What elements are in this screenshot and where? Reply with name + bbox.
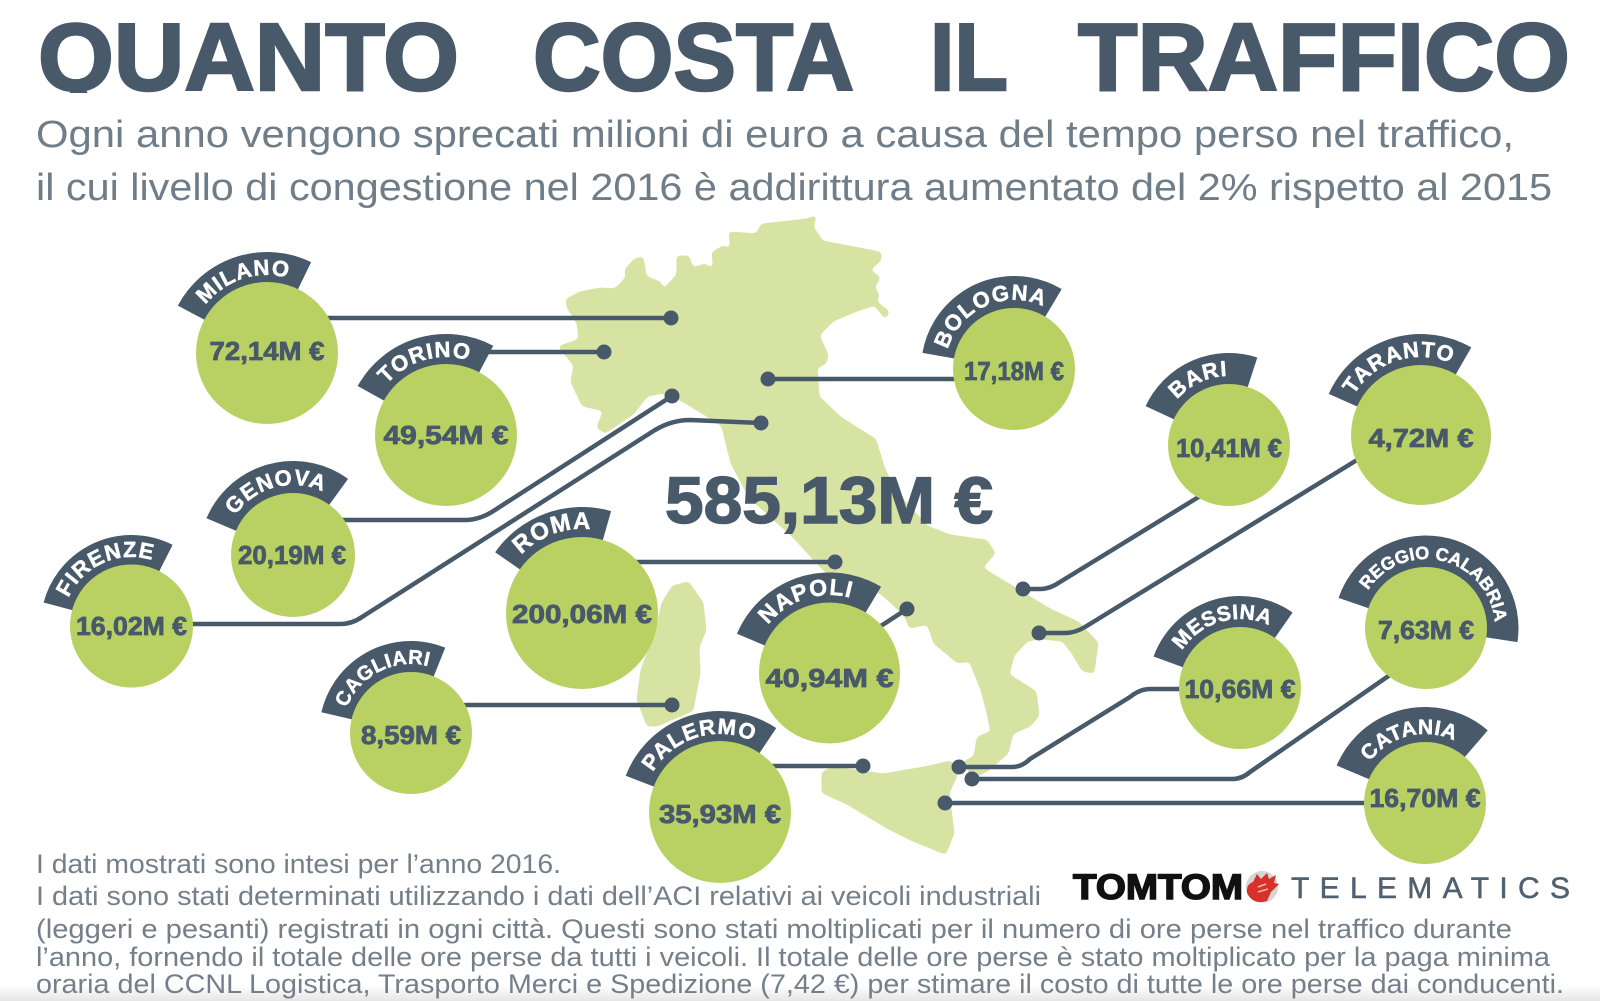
connector lines and dots xyxy=(170,310,1400,810)
city: Genova: GENOVA xyxy=(226,469,322,512)
wordmark: Telematics: TELEMATICS xyxy=(1291,872,1570,905)
city: Firenze: FIRENZE xyxy=(55,542,154,597)
city: Milano: 72,14M € xyxy=(210,336,324,366)
city: Reggio Calabria: 7,63M € xyxy=(1378,615,1474,645)
methodology note: (leggeri e pesanti) registrati in ogni città. Questi sono stati moltiplicati per il numero di ore perse nel traffico durante xyxy=(36,914,1512,944)
title: COSTA xyxy=(533,4,854,111)
city: Torino xyxy=(358,334,517,506)
city: Taranto: 4,72M € xyxy=(1368,423,1474,453)
Sardinia xyxy=(638,583,705,725)
city: Firenze: 16,02M € xyxy=(76,611,187,641)
methodology note: I dati sono stati determinati utilizzando i dati dell’ACI relativi ai veicoli industriali xyxy=(36,881,1041,911)
Sicily xyxy=(823,762,957,853)
city: Taranto: TARANTO xyxy=(1341,341,1454,392)
city: Palermo xyxy=(626,711,791,883)
city: Roma: ROMA xyxy=(511,512,590,554)
city: Torino: 49,54M € xyxy=(383,420,509,450)
city: Napoli: 40,94M € xyxy=(766,663,893,693)
city: Palermo: PALERMO xyxy=(640,718,756,772)
city: Messina: MESSINA xyxy=(1171,604,1269,650)
city: Bari: 10,41M € xyxy=(1176,433,1282,463)
title xyxy=(40,22,1568,93)
title: QUANTO xyxy=(38,4,459,111)
TomTom Telematics logo xyxy=(1073,868,1570,907)
city: Bologna: BOLOGNA xyxy=(934,284,1043,348)
city: Genova xyxy=(206,461,355,617)
city: Catania: 16,70M € xyxy=(1369,783,1481,813)
city: Bari xyxy=(1146,353,1290,506)
subtitle: Ogni anno vengono sprecati milioni di euro a causa del tempo perso nel traffico, xyxy=(36,114,1514,156)
map of Italy xyxy=(560,217,1097,853)
city: Messina: 10,66M € xyxy=(1184,674,1296,704)
subtitle xyxy=(36,114,1552,209)
total amount: 585,13M € xyxy=(665,463,993,537)
subtitle: il cui livello di congestione nel 2016 è addirittura aumentato del 2% rispetto al 2015 xyxy=(36,167,1552,209)
city: Genova: 20,19M € xyxy=(238,540,346,570)
methodology note xyxy=(36,849,1564,999)
city: Catania: CATANIA xyxy=(1362,719,1454,759)
icon: hands globe xyxy=(1246,871,1279,903)
methodology note: I dati mostrati sono intesi per l’anno 2016. xyxy=(36,849,561,879)
city: Taranto xyxy=(1328,334,1491,505)
city: Napoli xyxy=(737,572,900,744)
city: Bologna: 17,18M € xyxy=(964,356,1064,386)
city: Cagliari: CAGLIARI xyxy=(336,650,430,706)
city: Cagliari xyxy=(321,641,472,794)
city: Palermo: 35,93M € xyxy=(659,799,781,829)
city: Torino: TORINO xyxy=(376,342,470,381)
city: Roma: 200,06M € xyxy=(512,599,652,629)
city: Cagliari: 8,59M € xyxy=(361,720,461,750)
city: Catania xyxy=(1336,707,1488,864)
city: Firenze xyxy=(44,535,193,688)
methodology note: l’anno, fornendo il totale delle ore perse da tutti i veicoli. Il totale delle ore perse è stato moltiplicato per la paga minima xyxy=(36,942,1550,972)
mainland xyxy=(560,217,1097,777)
city: Reggio Calabria: REGGIO CALABRIA xyxy=(1358,546,1507,622)
city: Roma xyxy=(495,507,658,689)
city: Reggio Calabria xyxy=(1338,536,1518,689)
city: Milano: MILANO xyxy=(195,259,288,304)
city: Bari: BARI xyxy=(1167,360,1226,399)
city: Milano xyxy=(178,252,338,424)
city: Napoli: NAPOLI xyxy=(757,578,853,624)
title: IL xyxy=(930,4,1008,111)
methodology note: oraria del CCNL Logistica, Trasporto Merci e Spedizione (7,42 €) per stimare il costo di tutte le ore perse dai conducenti. xyxy=(36,969,1564,999)
city: Messina xyxy=(1154,596,1301,749)
title: TRAFFICO xyxy=(1078,4,1570,111)
wordmark: TomTom: TOMTOM xyxy=(1073,868,1243,907)
city: Bologna xyxy=(922,276,1075,430)
